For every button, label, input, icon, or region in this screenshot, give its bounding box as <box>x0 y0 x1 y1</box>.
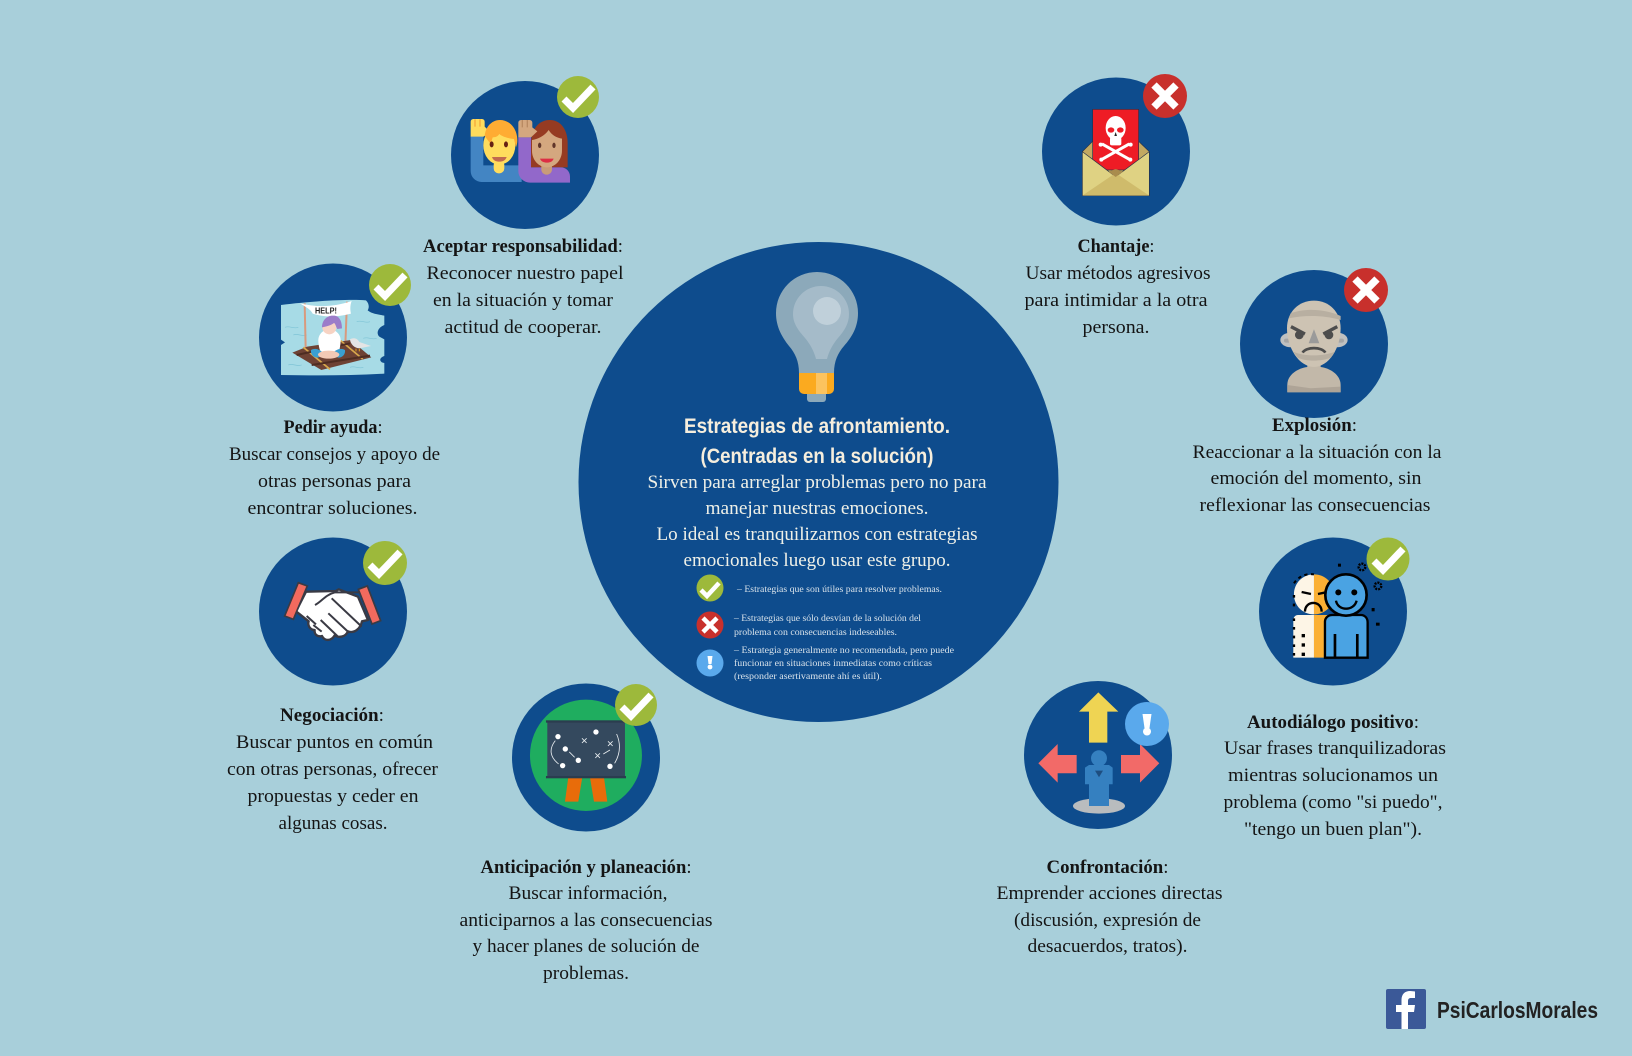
text: Pedir ayuda: Buscar consejos y apoyo de <box>229 444 440 465</box>
text: Autodiálogo positivo: problema (como "si puedo", <box>1224 792 1442 813</box>
icon: tactics board <box>530 700 642 811</box>
text: Aceptar responsabilidad: Aceptar responsabilidad: <box>423 236 623 257</box>
legend text: caution <box>733 645 954 681</box>
text: Anticipación y planeación: Anticipación y planeación: <box>480 857 692 878</box>
circle <box>1024 681 1172 829</box>
icon: handshake <box>285 583 381 640</box>
badge: check <box>1366 538 1410 580</box>
text: Confrontación: desacuerdos, tratos). <box>1028 936 1188 957</box>
text: Explosión: emoción del momento, sin <box>1210 468 1422 489</box>
text: Negociación: algunas cosas. <box>278 813 388 834</box>
text: Aceptar responsabilidad <box>423 236 624 338</box>
text: Pedir ayuda: otras personas para <box>258 471 412 492</box>
panel: Confrontación <box>996 681 1222 957</box>
legend text: useful: – Estrategias que son útiles para resolver problemas. <box>736 584 942 594</box>
central heading: (Centradas en la solución) <box>700 445 934 468</box>
legend icon: harmful <box>696 612 724 638</box>
circle <box>1259 538 1407 686</box>
text: Anticipación y planeación: y hacer planes de solución de <box>472 936 700 957</box>
legend icon: useful <box>696 574 724 602</box>
text: Chantaje: para intimidar a la otra <box>1024 290 1208 311</box>
central heading: Estrategias de afrontamiento. <box>684 415 950 438</box>
text: Chantaje <box>1024 236 1210 338</box>
panel: Autodiálogo positivo <box>1224 538 1446 840</box>
circle <box>1240 270 1388 418</box>
legend text: harmful: – Estrategias que sólo desvían de la solución del <box>733 613 922 623</box>
circle <box>512 684 660 832</box>
legend text: caution: funcionar en situaciones inmediatas como críticas <box>734 658 933 668</box>
badge: cross <box>1344 268 1388 312</box>
circle <box>1042 78 1190 226</box>
text: Confrontación: Emprender acciones directas <box>996 883 1222 904</box>
text: Anticipación y planeación: Buscar información, <box>508 883 668 904</box>
central description: manejar nuestras emociones. <box>706 498 928 519</box>
legend icon: caution <box>696 650 724 676</box>
central description: Sirven para arreglar problemas pero no para <box>648 472 987 493</box>
legend text: harmful: problema con consecuencias indeseables. <box>734 627 897 637</box>
panel: Aceptar responsabilidad <box>423 76 624 338</box>
text: Negociación: con otras personas, ofrecer <box>227 759 439 780</box>
icon: castaway on raft <box>281 300 384 375</box>
central description <box>648 472 987 571</box>
circle <box>451 81 599 229</box>
footer: Facebook credit <box>1386 989 1598 1029</box>
text: Explosión: reflexionar las consecuencias <box>1200 495 1430 516</box>
text: Explosión: Explosión: <box>1272 415 1357 436</box>
icon: castaway on raft: HELP! <box>315 307 337 316</box>
text: Negociación: Buscar puntos en común <box>236 732 434 753</box>
panel: central circle <box>578 242 1058 722</box>
text: Negociación: propuestas y ceder en <box>248 786 419 807</box>
text: Chantaje: Chantaje: <box>1078 236 1154 257</box>
text: Confrontación: Confrontación: <box>1046 857 1168 878</box>
icon: people raising hands <box>471 119 570 183</box>
text: Negociación: Negociación: <box>280 705 384 726</box>
legend text: caution: (responder asertivamente ahí es útil). <box>734 671 882 681</box>
text: Explosión: Reaccionar a la situación con la <box>1192 442 1442 463</box>
text: Autodiálogo positivo: Autodiálogo positivo: <box>1247 712 1419 733</box>
text: Aceptar responsabilidad: en la situación y tomar <box>433 290 614 311</box>
central description: Lo ideal es tranquilizarnos con estrategias <box>656 524 978 545</box>
panel: Chantaje <box>1024 74 1210 338</box>
text: Autodiálogo positivo: "tengo un buen plan"). <box>1244 819 1422 840</box>
text: Anticipación y planeación: problemas. <box>543 963 629 984</box>
panel: Explosión <box>1192 268 1442 516</box>
text: Anticipación y planeación <box>460 857 712 984</box>
central heading <box>684 415 950 468</box>
icon: light bulb <box>776 272 858 402</box>
circle <box>259 538 407 686</box>
text: Pedir ayuda: Pedir ayuda: <box>284 417 382 438</box>
text: Autodiálogo positivo: Usar frases tranquilizadoras <box>1224 738 1446 759</box>
panel: Negociación <box>227 538 439 834</box>
badge: cross <box>1143 74 1187 118</box>
text: Pedir ayuda: encontrar soluciones. <box>248 498 418 519</box>
text: Chantaje: persona. <box>1082 317 1150 338</box>
text: Autodiálogo positivo: mientras solucionamos un <box>1228 765 1439 786</box>
text: Confrontación: (discusión, expresión de <box>1014 910 1201 931</box>
central description: emocionales luego usar este grupo. <box>684 550 950 571</box>
text: page name: PsiCarlosMorales <box>1437 997 1598 1023</box>
badge: check <box>363 541 407 585</box>
text: Chantaje: Usar métodos agresivos <box>1026 263 1210 284</box>
icon: sad and happy person <box>1293 564 1381 658</box>
text: Explosión <box>1192 415 1442 516</box>
badge: check <box>557 76 599 118</box>
badge: check <box>369 264 411 306</box>
legend text: harmful <box>733 613 922 637</box>
icon: Facebook logo <box>1386 989 1426 1029</box>
text: Aceptar responsabilidad: Reconocer nuestro papel <box>426 263 624 284</box>
panel: Pedir ayuda <box>229 264 440 519</box>
text: Aceptar responsabilidad: actitud de cooperar. <box>444 317 602 338</box>
text: Confrontación <box>996 857 1222 957</box>
legend <box>696 574 954 681</box>
legend text: caution: – Estrategia generalmente no recomendada, pero puede <box>733 645 954 655</box>
icon: angry mummy <box>1280 301 1348 392</box>
badge: check <box>615 684 657 726</box>
text: Autodiálogo positivo <box>1224 712 1446 840</box>
text: Negociación <box>227 705 439 834</box>
central circle background <box>578 242 1058 722</box>
icon: blackmail envelope <box>1082 109 1149 196</box>
text: Pedir ayuda <box>229 417 440 519</box>
text: Anticipación y planeación: anticiparnos a las consecuencias <box>460 910 712 931</box>
badge: caution <box>1125 702 1169 746</box>
panel: Anticipación y planeación <box>460 684 712 984</box>
circle <box>259 264 407 412</box>
icon: person with direction arrows <box>1038 692 1159 814</box>
